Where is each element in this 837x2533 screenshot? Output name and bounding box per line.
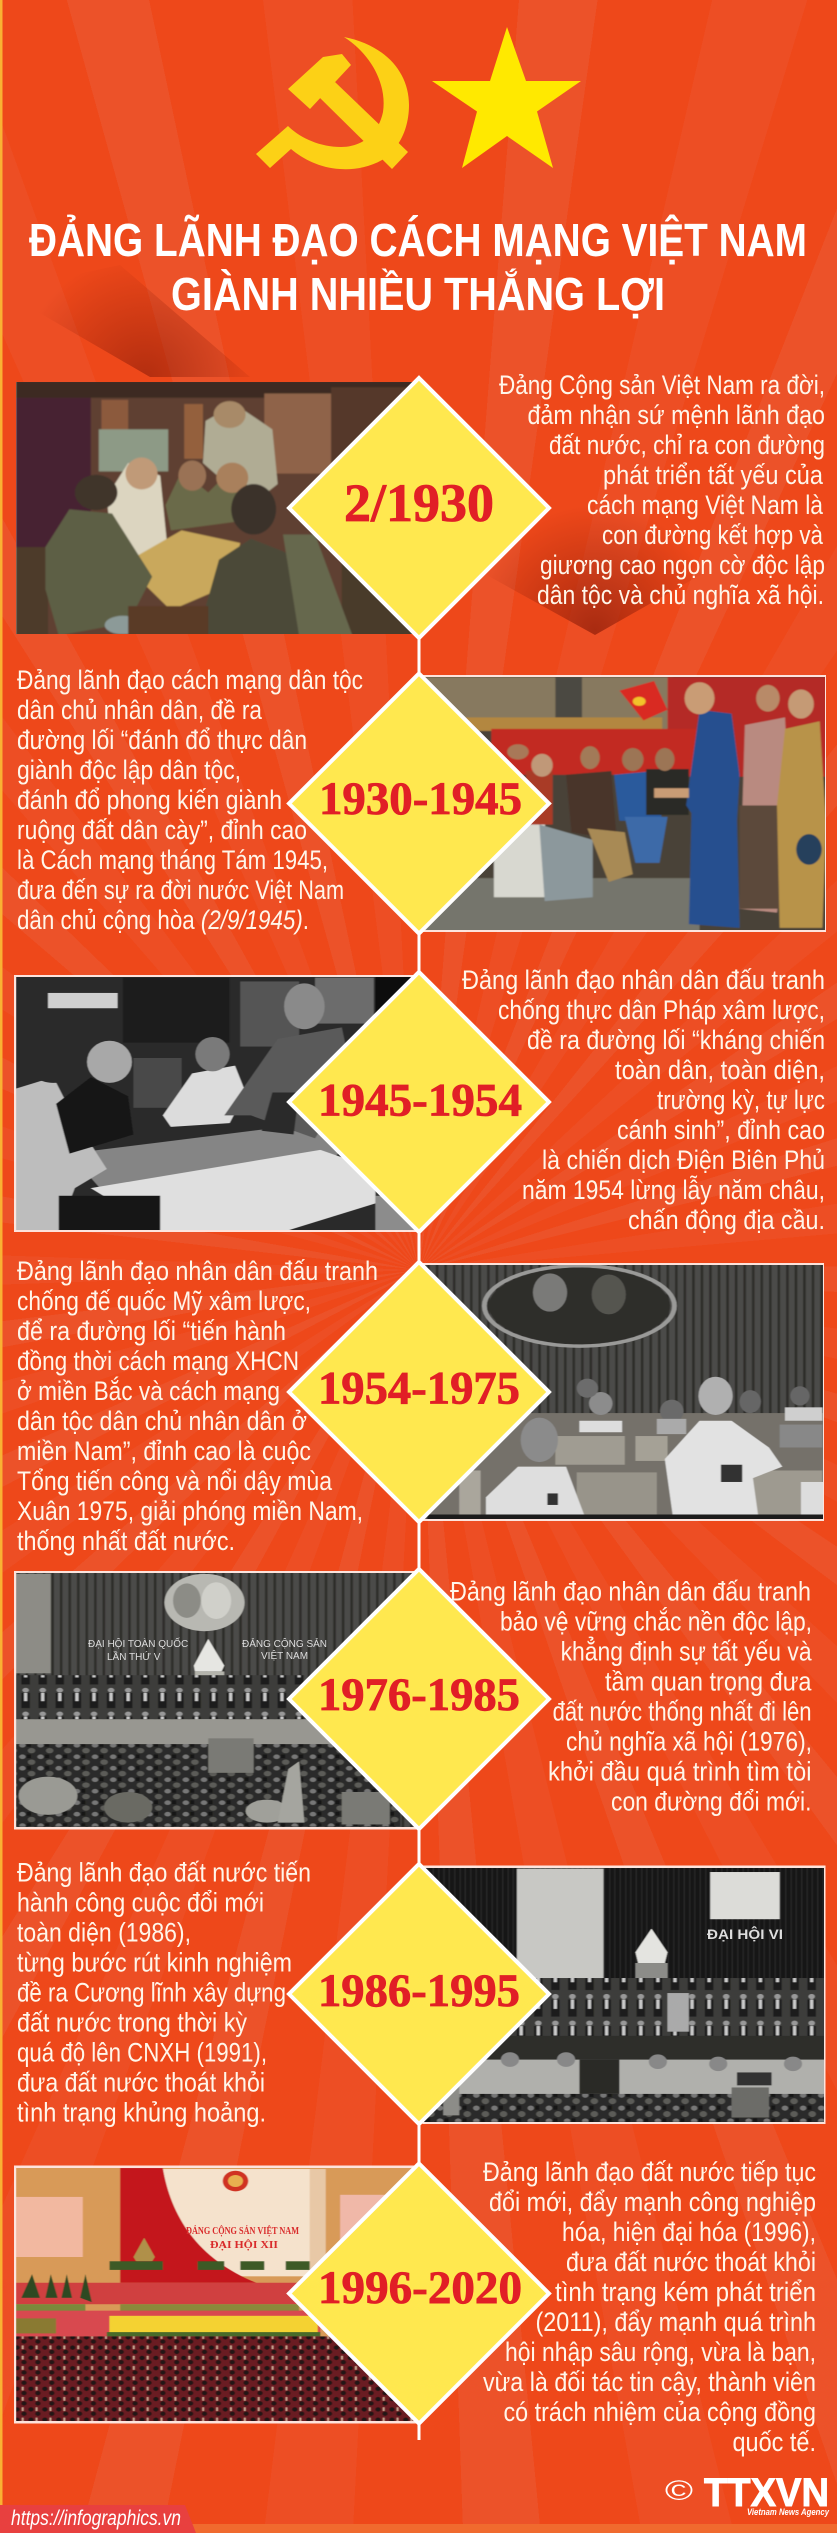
text block bbox=[17, 1256, 378, 1556]
text block: đất nước trong thời kỳ bbox=[17, 2008, 247, 2038]
icon: star bbox=[432, 27, 581, 168]
text block: miền Nam”, đỉnh cao là cuộc bbox=[17, 1436, 311, 1466]
date: 1930-1945 bbox=[319, 773, 522, 825]
photo caption text: ĐẠI HỘI TOÀN QUỐC bbox=[88, 1636, 188, 1650]
decorative folds bbox=[0, 265, 837, 635]
photo caption text: LẦN THỨ V bbox=[107, 1650, 161, 1663]
panel: 1930-1945 bbox=[17, 665, 833, 935]
text block: là Cách mạng tháng Tám 1945, bbox=[17, 845, 328, 875]
text block: Xuân 1975, giải phóng miền Nam, bbox=[17, 1496, 363, 1526]
text block: chống đế quốc Mỹ xâm lược, bbox=[17, 1286, 311, 1316]
text block: tầm quan trọng đưa bbox=[605, 1667, 812, 1697]
photo caption text bbox=[88, 1636, 327, 1663]
text block: Tổng tiến công và nổi dậy mùa bbox=[17, 1466, 333, 1496]
text block: quốc tế. bbox=[732, 2427, 816, 2457]
copyright symbol: © bbox=[665, 2475, 693, 2506]
text block bbox=[483, 2157, 816, 2457]
text block: đưa đến sự ra đời nước Việt Nam bbox=[17, 875, 344, 905]
title: GIÀNH NHIỀU THẮNG LỢI bbox=[171, 268, 665, 320]
panel: 1954-1975 bbox=[17, 1256, 828, 1556]
title bbox=[29, 214, 807, 320]
photo: fourth party congress hall bbox=[14, 1571, 422, 1830]
text block: dân chủ cộng hòa (2/9/1945). bbox=[17, 905, 309, 935]
photo: leaders around a map bbox=[14, 975, 423, 1232]
text block: để ra đường lối “tiến hành bbox=[17, 1316, 286, 1346]
timeline line bbox=[418, 600, 420, 2440]
photo: twelfth party congress bbox=[14, 2166, 422, 2424]
text block: đưa đất nước thoát khỏi bbox=[17, 2068, 265, 2098]
photo caption text: VIỆT NAM bbox=[261, 1649, 308, 1662]
panel: 1945-1954 bbox=[14, 965, 825, 1235]
text block: giành độc lập dân tộc, bbox=[17, 755, 241, 785]
date: 1976-1985 bbox=[318, 1669, 520, 1721]
photo: sixth party congress bbox=[422, 1866, 833, 2124]
text block bbox=[462, 965, 825, 1235]
text block: ruộng đất dân cày”, đỉnh cao bbox=[17, 815, 307, 845]
text block: thống nhất đất nước. bbox=[17, 1526, 235, 1556]
text block: đề ra Cương lĩnh xây dựng bbox=[17, 1978, 286, 2008]
photo caption text: ĐẢNG CỘNG SẢN bbox=[242, 1637, 327, 1650]
text block: Đảng lãnh đạo đất nước tiến bbox=[17, 1858, 311, 1888]
panel: 1986-1995 bbox=[17, 1858, 833, 2128]
text block: toàn diện (1986), bbox=[17, 1918, 191, 1948]
panel: 2/1930 bbox=[14, 370, 825, 638]
text block bbox=[17, 1858, 311, 2128]
text block: Đảng lãnh đạo nhân dân đấu tranh bbox=[17, 1256, 378, 1286]
text block: dân chủ nhân dân, đề ra bbox=[17, 695, 263, 725]
text block: Đảng lãnh đạo cách mạng dân tộc bbox=[17, 665, 363, 695]
text block: quá độ lên CNXH (1991), bbox=[17, 2038, 267, 2068]
photo caption text bbox=[186, 2224, 299, 2251]
photo: painting of founding meeting bbox=[14, 380, 422, 638]
text block: đường lối “đánh đổ thực dân bbox=[17, 725, 307, 755]
footer strip bbox=[0, 2524, 837, 2533]
photo caption text: ĐẠI HỘI VI bbox=[707, 1925, 783, 1942]
panel: 1996-2020 bbox=[14, 2157, 816, 2457]
text block: đánh đổ phong kiến giành bbox=[17, 785, 282, 815]
url banner: https://infographics.vn bbox=[11, 2507, 181, 2530]
photo: painting of Ho Chi Minh speaking bbox=[422, 675, 833, 932]
text block: hành công cuộc đổi mới bbox=[17, 1888, 264, 1918]
date: 1986-1995 bbox=[318, 1965, 520, 2017]
text block: tình trạng khủng hoảng. bbox=[17, 2098, 266, 2128]
text block bbox=[450, 1577, 812, 1817]
text block: ở miền Bắc và cách mạng bbox=[17, 1375, 280, 1406]
text block bbox=[17, 665, 363, 935]
photo caption text: ĐẢNG CỘNG SẢN VIỆT NAM bbox=[186, 2224, 299, 2237]
date: 1996-2020 bbox=[318, 2262, 522, 2314]
text block: đồng thời cách mạng XHCN bbox=[17, 1346, 299, 1376]
panel: 1976-1985 bbox=[14, 1569, 812, 1830]
photo caption text: ĐẠI HỘI XII bbox=[210, 2238, 278, 2251]
date: 1945-1954 bbox=[318, 1074, 522, 1126]
date: 2/1930 bbox=[344, 473, 494, 533]
logo: TTXVN: TTXVN bbox=[704, 2471, 829, 2515]
text block bbox=[499, 370, 825, 610]
date: 1954-1975 bbox=[318, 1362, 520, 1414]
text block: dân tộc dân chủ nhân dân ở bbox=[17, 1406, 307, 1436]
text block: từng bước rút kinh nghiệm bbox=[17, 1948, 292, 1978]
photo: Ho Chi Minh at the podium bbox=[422, 1263, 828, 1521]
icon: hammer and sickle bbox=[256, 37, 409, 169]
